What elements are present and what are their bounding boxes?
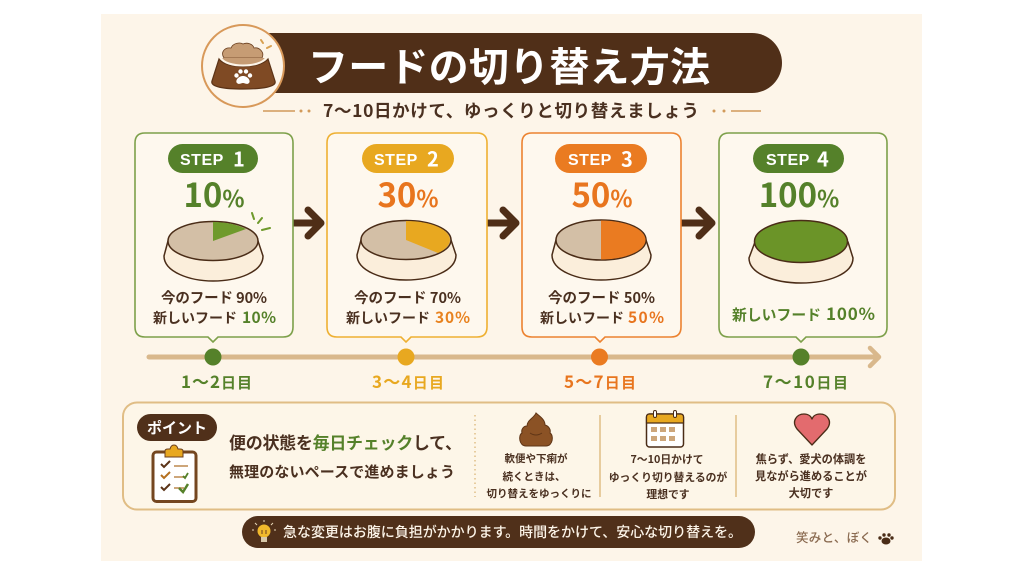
timeline marker 2: 3〜4日目 (372, 368, 444, 393)
arrow 3 (680, 210, 712, 236)
point main message: 便の状態を毎日チェックして、 (229, 429, 462, 454)
step badge 3: STEP (568, 152, 612, 169)
timeline marker 3 (564, 348, 636, 393)
icon: calendar (646, 410, 684, 447)
ratio text 2 (346, 287, 470, 328)
ratio text 1: 新しいフード (153, 308, 237, 328)
timeline marker 2 (372, 348, 444, 393)
step badge 3 (555, 144, 647, 173)
icon: food bowl (202, 25, 284, 107)
timeline marker 1: 1〜2日目 (181, 368, 252, 393)
step badge 2: STEP (374, 152, 418, 169)
icon: light bulb (252, 520, 276, 542)
icon: clipboard (153, 445, 196, 502)
icon: paw (878, 533, 894, 544)
timeline marker 4 (763, 348, 848, 393)
ratio text 1: 今のフード 90% (161, 287, 267, 308)
step badge 2 (362, 144, 454, 173)
tip text 1 (486, 451, 592, 501)
tip text 2: 7〜10日かけて (630, 451, 704, 467)
ratio text 2: 今のフード 70% (354, 287, 461, 308)
panel: step 1 (135, 133, 293, 342)
ratio text 2: 30% (435, 306, 470, 328)
bowl chart 50 percent (552, 220, 651, 280)
tip text 2 (609, 451, 727, 502)
background panel (101, 14, 922, 561)
tip text 1: 続くときは、 (502, 469, 566, 484)
panel: step 2 (327, 133, 487, 342)
step badge 4 (753, 144, 844, 173)
percentage 30: 30% (377, 169, 439, 217)
tip text 1: 軟便や下痢が (504, 451, 568, 466)
icon: heart (795, 414, 829, 445)
ratio text 3 (540, 287, 664, 328)
step badge 4: STEP (766, 152, 810, 169)
bottom message bar (242, 516, 755, 548)
ratio text 1 (153, 287, 276, 328)
point badge: ポイント (147, 417, 207, 438)
brand signature: 笑みと、ぼく (796, 527, 872, 546)
ratio text 2: 新しいフード (346, 308, 430, 328)
step badge 1 (168, 144, 258, 173)
ratio text 1: 10% (242, 306, 276, 328)
step badge 2: 2 (427, 144, 439, 172)
percentage 100: 100% (759, 169, 839, 217)
percentage 50: 50% (571, 169, 633, 217)
ratio text 3: 新しいフード (540, 308, 624, 328)
step badge 1: STEP (180, 152, 224, 169)
title banner: フードの切り替え方法 (308, 35, 710, 93)
icon: poop (520, 413, 552, 446)
bowl chart 100 percent (749, 220, 853, 283)
ratio text 4 (732, 300, 875, 325)
tip text 2: ゆっくり切り替えるのが (609, 469, 727, 485)
ratio text 4: 新しいフード (732, 304, 821, 325)
tip text 2: 理想です (646, 486, 690, 502)
timeline marker 4: 7〜10日目 (763, 368, 848, 393)
bowl chart 10 percent (164, 213, 270, 281)
ratio text 3: 今のフード 50% (548, 287, 655, 308)
bottom message bar: 急な変更はお腹に負担がかかります。時間をかけて、安心な切り替えを。 (283, 522, 742, 542)
panel: point (123, 402, 895, 510)
timeline marker 1 (181, 348, 252, 393)
tip text 3: 大切です (789, 485, 833, 501)
ratio text 4: 100% (826, 300, 875, 325)
tip text 3: 焦らず、愛犬の体調を (756, 451, 866, 467)
step badge 3: 3 (621, 144, 633, 172)
timeline marker 3: 5〜7日目 (564, 368, 636, 393)
tip text 1: 切り替えをゆっくりに (486, 486, 592, 501)
step badge 1: 1 (233, 144, 245, 172)
tip text 3 (755, 451, 867, 501)
ratio text 3: 50% (628, 306, 664, 328)
arrow 2 (486, 210, 516, 236)
step badge 4: 4 (817, 144, 829, 172)
panel: step 3 (522, 133, 681, 342)
point badge (137, 414, 217, 441)
timeline (149, 348, 879, 393)
tip text 3: 見ながら進めることが (755, 468, 867, 484)
panel: step 4 (719, 133, 887, 342)
point main message (229, 429, 462, 482)
subtitle: 7〜10日かけて、ゆっくりと切り替えましょう (323, 98, 699, 123)
point main message: 無理のないペースで進めましょう (229, 461, 455, 482)
arrow 1 (292, 210, 321, 236)
bowl chart 30 percent (357, 220, 456, 280)
percentage 10: 10% (183, 169, 245, 217)
